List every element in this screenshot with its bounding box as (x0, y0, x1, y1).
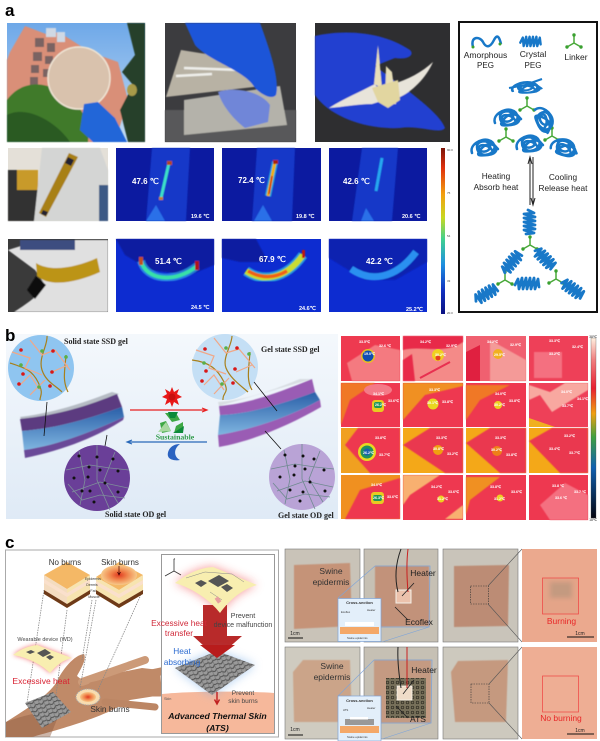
temperature readouts: 34.1℃ (373, 391, 385, 396)
labels: skin layers: Epidermis (85, 577, 101, 581)
axis labels: z (174, 557, 176, 561)
axis icon (165, 559, 181, 576)
temperature readouts: 34.0℃ (371, 482, 383, 487)
temperature readouts (359, 338, 589, 501)
detail circle: solid state SSD gel (8, 335, 74, 401)
thermal colour scale bar (441, 148, 453, 315)
temperature readouts: 34.0℃ (561, 389, 573, 394)
legend: amorphous PEG: Amorphous (464, 50, 507, 60)
temperature readouts: 30.2℃ (494, 402, 506, 407)
hand illustration (6, 654, 163, 737)
inset: ATS cross-section (338, 660, 431, 741)
thermal image: 42.2 C (329, 239, 427, 313)
temperature readouts: 33.3℃ (429, 387, 441, 392)
temperature readouts: 34.0℃ (495, 391, 507, 396)
thermal row 4 (341, 475, 588, 520)
thermal image: 67.9 C: 24.6℃ (299, 305, 317, 312)
label: heating absorb heat: Absorb heat (474, 182, 519, 192)
icon: heat transfer arrow (193, 605, 242, 658)
temperature readouts: 34.2℃ (420, 339, 432, 344)
panel label b: b (5, 326, 15, 345)
detail circle: gel state SSD gel (192, 334, 258, 400)
title: advanced thermal skin: Advanced Thermal Skin (167, 711, 267, 721)
temperature readouts: 33.3℃ (549, 338, 561, 343)
thermal image: 72.4 C: 72.4 ℃ (238, 176, 265, 185)
molecule: cooled crystalline network (473, 210, 585, 305)
label: solid state OD gel: Solid state OD gel (105, 510, 167, 519)
temperature readouts: 33.8℃ (375, 435, 387, 440)
thermal colour scale bar: 20.0 (447, 311, 453, 315)
thermal row 3 (341, 428, 588, 473)
temperature readouts: 33.3℃ (436, 435, 448, 440)
photo: epidermis after heating (443, 549, 518, 642)
photo: bare swine epidermis: Swine (319, 566, 343, 576)
leader lines (44, 382, 281, 449)
label: no burns: No burns (49, 558, 81, 567)
thermal image: 47.6 C (116, 148, 214, 221)
label: prevent skin burns: Prevent (232, 690, 254, 697)
temperature readouts: 30.2℃ (491, 447, 503, 452)
title: advanced thermal skin: (ATS) (206, 723, 229, 733)
temperature readouts: 33.4℃ (549, 446, 561, 451)
photo: heater on Ecoflex (364, 549, 438, 642)
thermal colour scale bar: 54 (447, 234, 451, 238)
label: skin burns on cube: Skin burns (101, 558, 139, 567)
thermal image: 72.4 C: 19.8 ℃ (296, 213, 315, 220)
temperature readouts: 33.3℃ (495, 435, 507, 440)
panel: PEG film photographs (7, 23, 450, 142)
arrow: cooling blue (127, 440, 207, 444)
inset: Ecoflex cross-section: Swine epidermis (347, 636, 368, 640)
label: solid state SSD gel: Solid state SSD gel (64, 337, 129, 346)
temperature readouts: 33.2℃ (564, 433, 576, 438)
temperature readouts: 31.2℃ (437, 496, 449, 501)
inset: ATS cross-section: ATS (343, 708, 348, 712)
temperature readouts: 33.8℃ (509, 398, 521, 403)
photo: bare swine epidermis: epidermis (313, 577, 349, 587)
icon: moon (168, 444, 180, 460)
label: cooling release heat: Cooling (549, 172, 577, 182)
icon: recycle sustainable: Sustainable (156, 432, 195, 442)
labels: skin layers: Fat (90, 589, 96, 593)
legend: crystal PEG: Crystal (520, 49, 546, 59)
photo: heater strip on sleeve (8, 148, 108, 221)
panel label a: a (5, 1, 15, 20)
thermal image: 51.4 C (116, 239, 214, 312)
inset: Ecoflex cross-section: Ecoflex (341, 610, 351, 614)
photo: magnified burning area: 1cm (575, 631, 585, 637)
thermal image: 47.6 C: 19.6 ℃ (191, 213, 210, 220)
legend: linker: Linker (564, 52, 588, 62)
temperature readouts: 26.2℃ (375, 402, 387, 407)
photo: heater on ATS (364, 647, 438, 739)
inset: Ecoflex cross-section (338, 566, 429, 642)
photo: bare swine epidermis: epidermis (314, 672, 350, 682)
label: skin: Skin (164, 697, 171, 701)
inset: ATS cross-section: Cross-section (346, 698, 373, 703)
temperature readouts: 33.7℃ (379, 452, 391, 457)
temperature readouts: 34.1℃ (577, 396, 589, 401)
temperature readouts: 33.6℃ (387, 494, 399, 499)
label: prevent device malfunction: device malfunction (214, 621, 272, 629)
temperature readouts: 19.0℃ (364, 351, 376, 356)
panel: PEG network schematic (459, 22, 597, 312)
temperature readouts: 33.2℃ (549, 351, 561, 356)
panel: swine epidermis test, ATS row (285, 647, 597, 741)
temperature readouts: 31.2℃ (494, 496, 506, 501)
inset: Ecoflex cross-section: Cross-section (346, 600, 373, 605)
thermal image: 42.2 C: 25.2℃ (406, 306, 424, 313)
heat down arrow (214, 692, 220, 704)
panel: thermal camera image grid (341, 335, 598, 522)
temperature readouts: 34.2℃ (487, 339, 499, 344)
slab: gel state bilayer (218, 379, 321, 447)
thermal image: 42.6 C: 20.6 ℃ (402, 213, 421, 220)
thermal colour scale bar: 33 (447, 279, 451, 283)
label: excessive heat: Excessive heat (12, 676, 70, 686)
photo: magnified burning area: Burning (547, 616, 576, 626)
temperature readouts: 33.8℃ (442, 399, 454, 404)
temperature readouts: 30.8℃ (433, 446, 445, 451)
photo: magnified no burning area: 1cm (575, 728, 585, 734)
photo: bare swine epidermis (285, 647, 360, 739)
skin layer (162, 692, 274, 733)
panel: thermal images, bent arm (8, 239, 427, 313)
thermal image: 51.4 C: 51.4 ℃ (155, 257, 182, 266)
thermal image: 67.9 C: 67.9 ℃ (259, 255, 286, 264)
labels: skin layers (85, 577, 101, 599)
temperature readouts: 32.6 ℃ (379, 343, 392, 348)
photo: heater on ATS: Heater (411, 665, 437, 675)
thermal image: 42.2 C: 42.2 ℃ (366, 257, 393, 266)
temperature readouts: 26.3℃ (373, 495, 385, 500)
photo: heater on Ecoflex: Heater (410, 568, 436, 578)
legend: linker (564, 33, 588, 62)
panel: wearable device burns schematic (6, 550, 278, 737)
mesh on wrist (25, 692, 71, 728)
zoom guide lines (489, 647, 522, 739)
label: excessive heat transfer: Excessive heat (151, 618, 208, 628)
label: prevent device malfunction: Prevent (231, 612, 255, 620)
temperature readouts: 33.6 ℃ (555, 495, 568, 500)
thermal image: 51.4 C: 24.5 ℃ (191, 304, 210, 311)
thermal image: 67.9 C (222, 239, 321, 312)
thermal colour scale bar: 90.0 (447, 148, 453, 152)
temperature readouts: 33.6℃ (448, 489, 460, 494)
glow behind mesh (175, 651, 255, 695)
sub-panel: advanced thermal skin (151, 554, 274, 734)
legend: amorphous PEG (464, 37, 507, 70)
temperature readouts: 30.1℃ (427, 400, 439, 405)
label: cooling release heat: Release heat (539, 183, 588, 193)
glow under device (175, 567, 257, 613)
panel: gel bilayer schematic (6, 334, 338, 520)
temperature readouts: 34.2℃ (431, 484, 443, 489)
inset: ATS cross-section: Heater (367, 706, 375, 710)
arrow tip over mesh (200, 645, 235, 658)
temperature readouts: 33.7℃ (569, 450, 581, 455)
arrow: heating red (130, 408, 207, 412)
thermal row 2 (341, 383, 588, 427)
temperature readouts: 32.9℃ (510, 342, 522, 347)
panel: thermal images, straight arm (8, 148, 427, 221)
icon: recycle sustainable (156, 412, 195, 442)
label: heating absorb heat: Heating (482, 171, 510, 181)
skin cube: skin burns (96, 562, 143, 608)
thermal row 1 (341, 336, 588, 381)
photo: bare swine epidermis: Swine (320, 661, 344, 671)
labels: skin layers: Dermis (86, 583, 98, 587)
temperature readouts: 33.8℃ (490, 484, 502, 489)
panel: swine epidermis test, Ecoflex row (285, 549, 597, 642)
temperature readouts: 32.4℃ (572, 344, 584, 349)
thermal image: 42.6 C: 42.6 ℃ (343, 177, 370, 186)
photo: magnified burning area (522, 549, 597, 642)
temperature readouts: 33.8℃ (506, 452, 518, 457)
temperature readouts: 32.9℃ (446, 343, 458, 348)
thermal colour scale bar: 75 (447, 191, 451, 195)
temperature readouts: 33.7℃ (562, 403, 574, 408)
thermal image: 72.4 C (222, 148, 321, 221)
icon: sun (162, 387, 182, 407)
temperature readouts: 33.6℃ (388, 398, 400, 403)
temperature readouts: 30.2℃ (435, 352, 447, 357)
inset: ATS cross-section: Swine epidermis (347, 735, 368, 739)
burn spot on hand (76, 689, 100, 705)
zoom guide lines (488, 549, 522, 642)
panel label c: c (5, 533, 14, 552)
photo: bare swine epidermis: 1cm (290, 727, 300, 733)
label: heat absorbing: Heat (173, 646, 191, 656)
legend: crystal PEG: PEG (525, 61, 541, 70)
thermal colour scale bar with end labels (589, 335, 598, 522)
photo: heater on ATS: ATS (410, 714, 426, 724)
skin cube: no burns (44, 562, 90, 608)
labels: skin layers: Muscle (88, 595, 100, 599)
arrows: reversible heating and cooling (528, 157, 535, 205)
photo: bare swine epidermis (285, 549, 360, 642)
photo: epidermis after heating (443, 647, 518, 739)
temperature readouts: 29.5℃ (494, 352, 506, 357)
dashed magnifying lines (27, 590, 143, 703)
label: gel state SSD gel: Gel state SSD gel (261, 345, 320, 354)
thermal image: 42.6 C (329, 148, 427, 221)
icon: thermal skin mesh (175, 651, 255, 695)
inset: Ecoflex cross-section: Heater (367, 608, 375, 612)
temperature readouts: 26.2℃ (363, 450, 375, 455)
temperature readouts: 33.7 ℃ (574, 489, 587, 494)
label: gel state OD gel: Gel state OD gel (278, 511, 335, 520)
molecule: heated amorphous network (472, 79, 580, 159)
slab: solid state bilayer (20, 392, 124, 458)
icon: wearable device hot (13, 645, 72, 673)
photo: magnified no burning area (522, 647, 597, 739)
detail circle: gel state OD gel (269, 444, 335, 510)
photo: flexible film folded by gloved hand (165, 23, 296, 142)
temperature readouts: 33.2℃ (447, 451, 459, 456)
label: skin burns on hand: Skin burns (90, 704, 130, 714)
photo: heater strip on bent elbow (8, 239, 108, 312)
temperature readouts: 33.6℃ (511, 489, 523, 494)
label: excessive heat transfer: transfer (165, 628, 193, 638)
label: heat absorbing: absorbing (164, 657, 201, 667)
photo: bare swine epidermis: 1cm (290, 631, 300, 637)
temperature readouts: 33.8 ℃ (552, 483, 565, 488)
photo: origami crane on gloved palm (315, 23, 450, 142)
label: prevent skin burns: skin burns (228, 698, 259, 705)
thermal colour scale bar with end labels: 38℃ (589, 335, 598, 339)
thermal image: 47.6 C: 47.6 ℃ (132, 177, 159, 186)
label: wearable device: Wearable device (WD) (17, 637, 73, 643)
icon: wearable device (175, 567, 257, 613)
legend: crystal PEG (520, 37, 546, 70)
thermal colour scale bar with end labels: 18℃ (589, 518, 598, 522)
detail circle: solid state OD gel (64, 445, 130, 511)
temperature readouts: 33.5℃ (359, 339, 371, 344)
photo: magnified no burning area: No burning (540, 713, 582, 723)
photo: heater on Ecoflex: Ecoflex (405, 617, 434, 627)
legend: amorphous PEG: PEG (477, 61, 494, 70)
photo: film disc held in front of building (7, 23, 145, 142)
